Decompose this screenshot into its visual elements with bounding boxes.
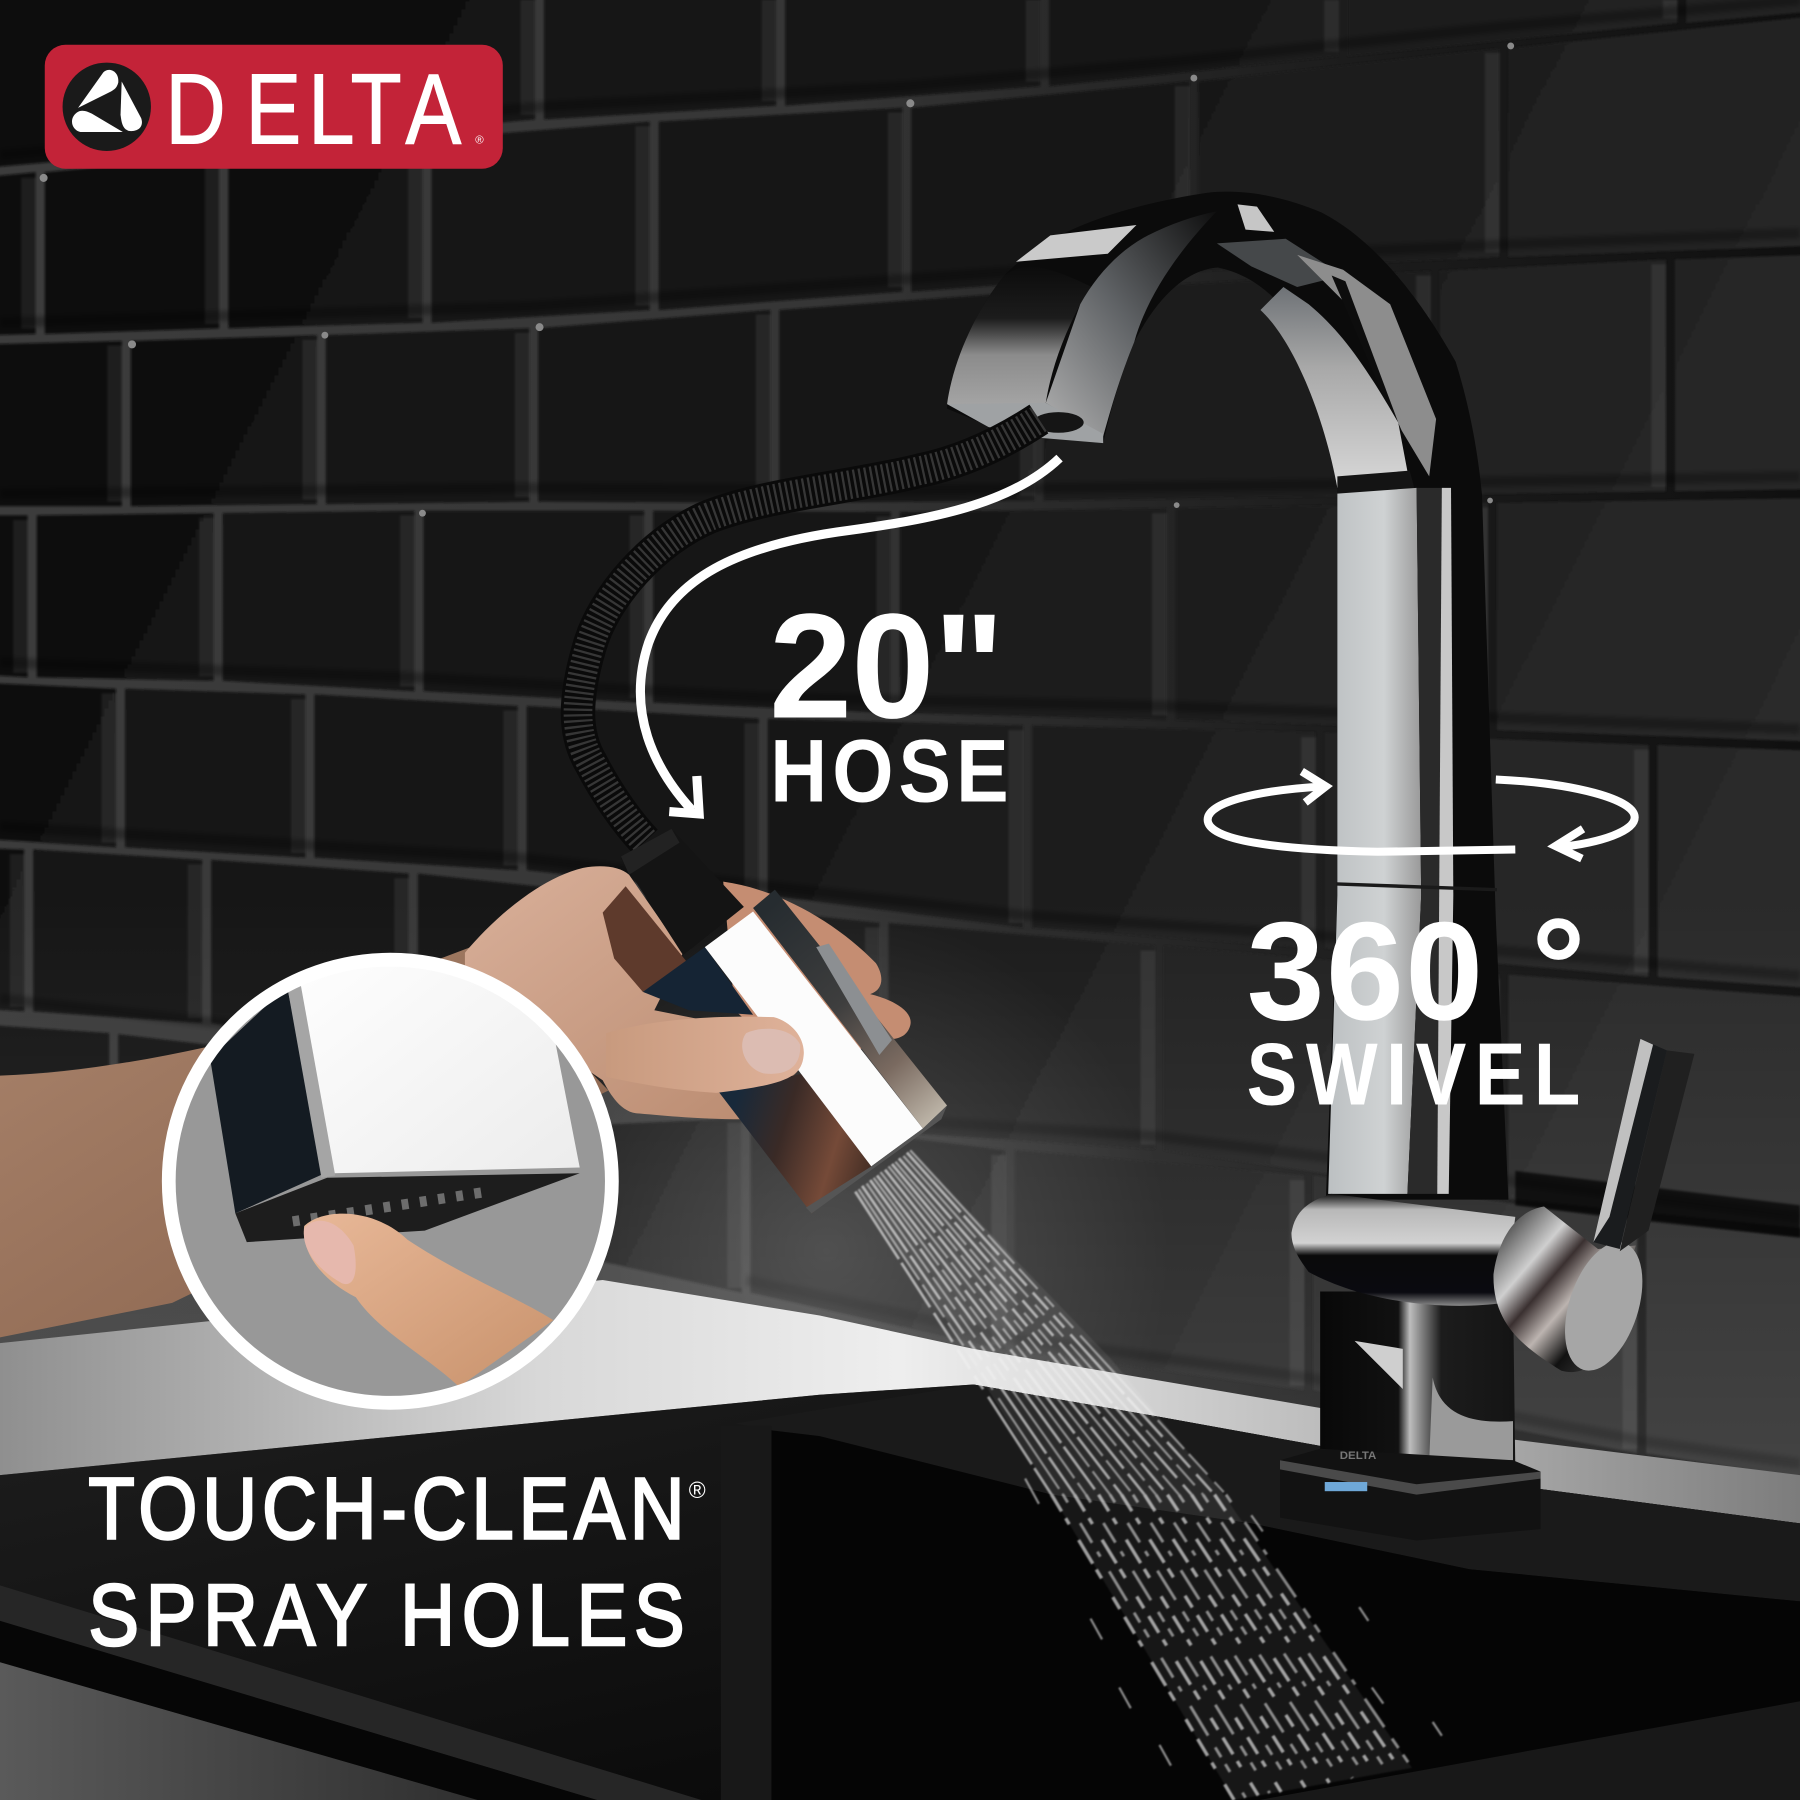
- arrow: swivel rotation: [1208, 771, 1635, 859]
- inset: spray face with holes: [235, 1173, 580, 1242]
- label: 20 inch hose: 20": [769, 582, 1004, 749]
- inset circle: touch-clean detail: [168, 947, 613, 1404]
- logo: Delta: [45, 45, 503, 169]
- inset: fingertip: [304, 1214, 553, 1387]
- faucet base block: [1320, 1291, 1515, 1469]
- label: touch-clean spray holes: ®: [689, 1477, 706, 1503]
- pull-down sprayer: [606, 829, 947, 1213]
- faucet mounting plate: DELTA: [1340, 1450, 1376, 1462]
- inset: sprayer dark facet: [210, 986, 325, 1213]
- label: 360 degree swivel: 360: [1247, 892, 1483, 1049]
- label: 360 degree swivel: SWIVEL: [1247, 1025, 1580, 1124]
- label: 20 inch hose: HOSE: [770, 721, 1009, 820]
- label: 20 inch hose: [769, 582, 1009, 820]
- faucet: [947, 192, 1694, 1541]
- faucet collar: [1291, 1194, 1515, 1306]
- faucet mounting plate: [1280, 1449, 1541, 1541]
- arrow: hose length: [640, 458, 1060, 814]
- label: touch-clean spray holes: TOUCH-CLEAN: [88, 1460, 685, 1557]
- label: touch-clean spray holes: SPRAY HOLES: [88, 1567, 685, 1664]
- logo: Delta: ®: [475, 134, 484, 146]
- logo mark: [63, 63, 151, 151]
- logo wordmark: DELTA: [165, 54, 462, 165]
- label: 360 degree swivel: °: [1531, 890, 1586, 1042]
- label: touch-clean spray holes: [88, 1460, 706, 1664]
- inset: sprayer bright face: [301, 966, 580, 1174]
- hand holding sprayer: [465, 866, 911, 1119]
- braided hose: [578, 419, 1039, 841]
- water spray: [855, 1150, 1442, 1800]
- countertop: [0, 1280, 1800, 1523]
- forearm: [0, 947, 608, 1337]
- sink: [0, 1384, 1800, 1800]
- label: 360 degree swivel: [1247, 890, 1586, 1124]
- faucet spout: [947, 192, 1508, 1200]
- faucet handle: [1493, 1039, 1694, 1380]
